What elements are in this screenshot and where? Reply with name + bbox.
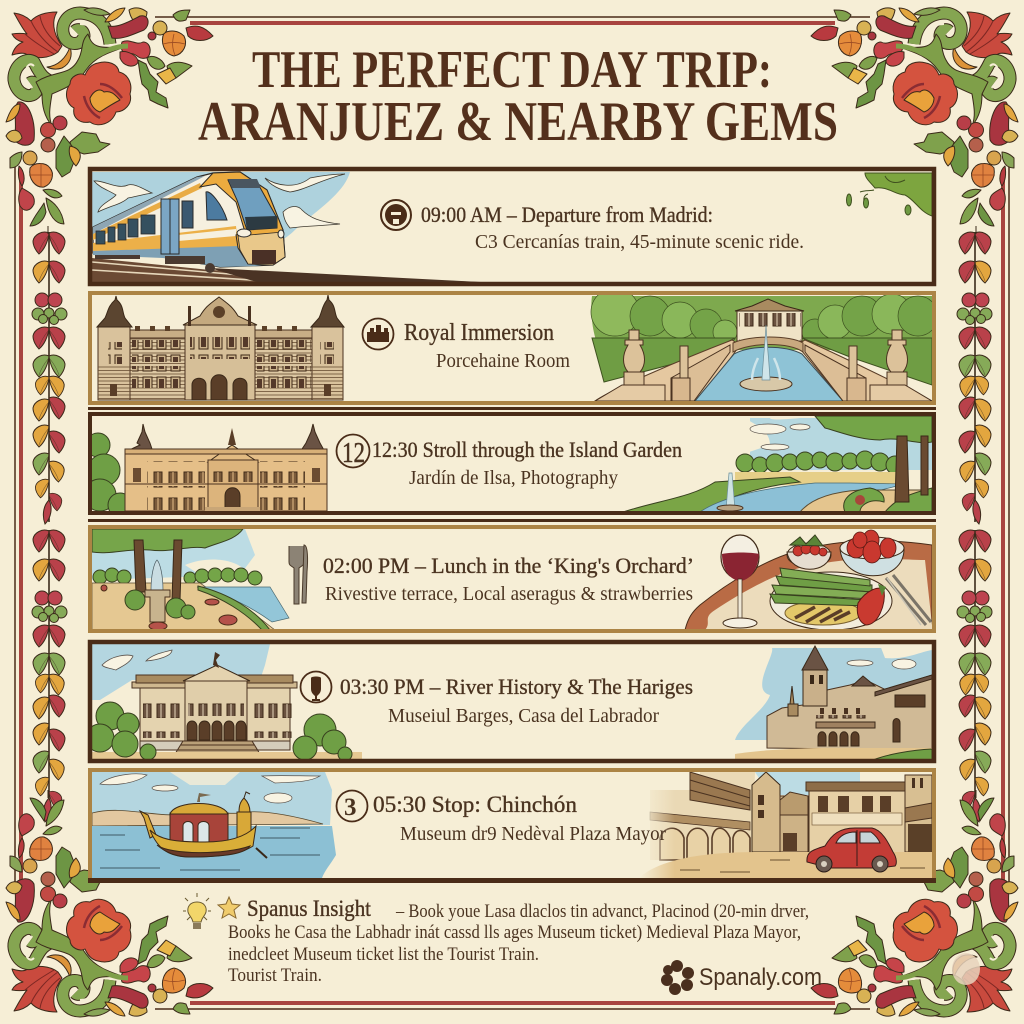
step text	[340, 674, 693, 727]
church	[735, 648, 932, 740]
icon: number 12: 12	[342, 437, 365, 469]
brand logo	[661, 960, 822, 995]
table	[685, 541, 932, 630]
illustration: Casa del Labrador and church	[86, 644, 932, 761]
panel: Chinchon stop	[88, 770, 936, 883]
insight text: Spanus Insight	[247, 896, 372, 921]
step text	[421, 202, 804, 253]
insight box	[183, 893, 809, 986]
step text: 03:30 PM – River History & The Hariges	[340, 674, 693, 699]
step text: Rivestive terrace, Local aseragus & strawberries	[325, 583, 693, 605]
panel: river history	[86, 642, 934, 761]
icon: fork and knife	[289, 545, 308, 604]
plaza	[755, 772, 860, 795]
panel: island garden	[84, 414, 934, 517]
floral corner: top right	[811, 8, 1018, 234]
insight text: – Book youe Lasa dlaclos tin advanct, Placinod (20-min drver,	[395, 902, 809, 922]
garden	[591, 296, 932, 350]
floral corner: bottom left	[6, 790, 213, 1016]
icon: crown chest	[362, 318, 394, 350]
floral corner: top left	[6, 8, 213, 234]
title	[198, 40, 838, 153]
insight text: Tourist Train.	[228, 966, 322, 986]
title: ARANJUEZ & NEARBY GEMS	[198, 92, 838, 153]
step text	[372, 437, 682, 489]
step text: Porcehaine Room	[436, 350, 570, 372]
step text	[373, 792, 666, 845]
step text: Royal Immersion	[404, 320, 554, 346]
step text: 12:30 Stroll through the Island Garden	[372, 437, 682, 462]
step text: C3 Cercanías train, 45-minute scenic ride.	[475, 231, 804, 253]
floral corner: bottom right	[811, 790, 1018, 1016]
divider band	[88, 519, 936, 522]
step text: 09:00 AM – Departure from Madrid:	[421, 202, 713, 227]
tree branch	[865, 173, 932, 216]
step text: Jardín de Ilsa, Photography	[409, 467, 618, 489]
island garden	[750, 418, 932, 470]
illustration: park and lunch table	[92, 529, 932, 630]
step text: Museum dr9 Nedèval Plaza Mayor	[400, 823, 666, 845]
side vine: left	[32, 232, 67, 822]
brand logo: Spanaly.com	[699, 964, 822, 991]
icon: river history badge	[300, 672, 332, 702]
insight text: Books he Casa the Labhadr inát cassd lls ages Museum ticket) Medieval Plaza Mayor,	[228, 923, 801, 943]
panel: royal immersion	[90, 288, 938, 403]
corner smudge	[952, 953, 980, 985]
insight text	[228, 896, 809, 986]
divider band	[88, 407, 936, 410]
icon: number 3: 3	[344, 794, 356, 821]
panel: departure	[90, 169, 934, 284]
icon: star	[218, 897, 240, 918]
illustration: garden palace and river	[84, 416, 932, 517]
icon: departure badge	[381, 200, 411, 230]
step text: Museiul Barges, Casa del Labrador	[388, 705, 659, 727]
step text	[323, 553, 694, 605]
step text: 05:30 Stop: Chinchón	[373, 792, 578, 817]
illustration: barge and plaza	[92, 772, 932, 878]
insight text: inedcleet Museum ticket list the Tourist Train.	[228, 945, 539, 965]
illustration: train	[92, 172, 932, 283]
icon: number 3	[336, 790, 368, 822]
side vine: right	[957, 232, 992, 822]
title: THE PERFECT DAY TRIP:	[252, 40, 772, 99]
step text: 02:00 PM – Lunch in the ‘King's Orchard’	[323, 553, 694, 578]
panel: lunch	[90, 527, 934, 631]
illustration: royal palace	[97, 288, 938, 401]
step text	[404, 320, 570, 372]
icon: light bulb	[183, 893, 211, 929]
